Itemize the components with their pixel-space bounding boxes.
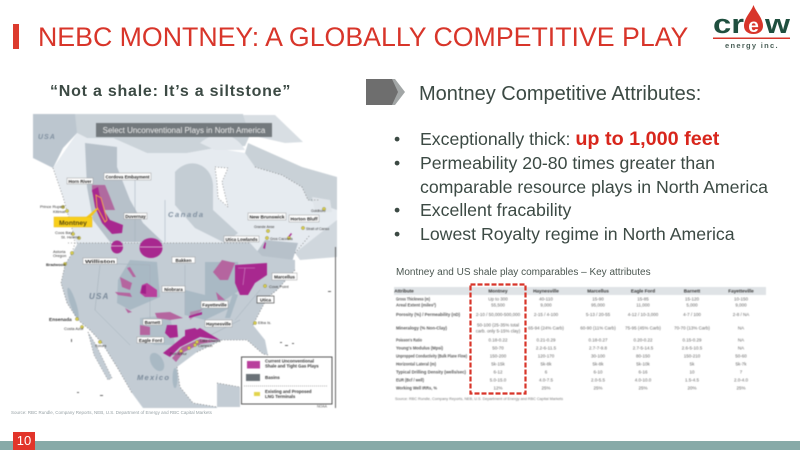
logo wordmark — [713, 9, 791, 39]
table values: 5k-10k — [636, 362, 650, 366]
table values: 40-110 — [539, 296, 553, 302]
attribute bullets: • — [394, 129, 400, 149]
table values: 0.15-0.29 — [682, 338, 702, 342]
Montney callout: Montney — [59, 220, 87, 227]
play name labels: Utica Lowlands — [226, 237, 258, 242]
table header row: Barnett — [684, 288, 701, 294]
country label: USA north: USA — [38, 134, 56, 141]
table values: 15-90 — [592, 296, 604, 302]
table values: NA — [738, 346, 744, 350]
table values: 150-210 — [684, 354, 701, 358]
terminal labels: Lake Charles — [200, 339, 221, 343]
bullet: thick — [394, 128, 720, 150]
state and province borders — [92, 180, 260, 345]
page number — [13, 432, 35, 450]
table values: 25% — [541, 386, 551, 390]
bullet: permeability: • — [394, 153, 400, 173]
table values: 50-100 (25-35% total — [477, 322, 519, 328]
page number: 10 — [17, 433, 31, 448]
table header row: Marcellus — [587, 288, 609, 294]
table values: 2-8 / NA — [733, 312, 749, 317]
attribute bullets: • — [394, 224, 400, 244]
play name labels: Marcellus — [274, 274, 295, 280]
terminal labels: Sonora — [95, 344, 106, 348]
hudson platform basin — [175, 163, 238, 243]
attribute names: Unpropped Conductivity (Bulk Plane Flow) — [396, 354, 467, 358]
attribute bullets: Exceptionally thick: up to 1,000 feet — [420, 128, 719, 150]
table values: 0.20-0.22 — [633, 338, 653, 342]
play name labels: Bakken — [175, 258, 192, 263]
play name labels: Haynesville — [206, 321, 231, 326]
map legend: LNG Terminals — [265, 394, 296, 399]
play name labels: New Brunswick — [250, 214, 285, 219]
terminal labels: Astoria — [53, 249, 66, 254]
map of unconventional plays — [32, 114, 338, 408]
terminal labels: Bradwood — [46, 262, 66, 267]
baja coast speckle — [88, 332, 112, 380]
table header row: Eagle Ford — [631, 288, 655, 294]
map title banner: Select Unconventional Plays in North America — [103, 126, 266, 135]
attribute bullets: • — [394, 200, 400, 220]
scattered caribbean islands — [71, 291, 331, 396]
terminal labels: Strait of Canso — [306, 227, 329, 231]
table values: 2.0-5.5 — [591, 378, 605, 382]
table values: 50-60 — [735, 354, 747, 358]
table values: 6-10 — [593, 370, 603, 374]
logo wordmark: w — [764, 9, 791, 39]
table values: 60-90 (11% Carb) — [580, 326, 616, 330]
table values: 4.0-10.0 — [635, 378, 652, 382]
land: hudson strait band — [245, 143, 337, 210]
table values: 2.6-5-10.5 — [682, 346, 703, 350]
terminal labels: Cove Point — [269, 284, 289, 289]
hudson bay — [215, 167, 228, 207]
attribute names: Porosity (%) / Permeability (nD) — [396, 312, 460, 317]
land: baja — [88, 332, 112, 380]
land: baffin island — [243, 115, 303, 143]
footer band — [0, 441, 800, 450]
land: arctic islands — [75, 114, 250, 153]
Montney callout — [54, 208, 98, 227]
land: usa and mexico — [61, 243, 295, 408]
table values: carb. only 5-15% clay) — [476, 328, 521, 334]
table header row: Fayetteville — [728, 288, 754, 294]
table values: 12% — [493, 386, 503, 390]
table values: 25% — [593, 386, 603, 390]
attribute bullets — [394, 128, 768, 244]
table values: 75-95 (45% Carb) — [625, 326, 661, 330]
table values: 2.2-6-11.5 — [536, 346, 557, 350]
attribute names — [396, 296, 467, 390]
table values: 120-170 — [538, 354, 555, 358]
logo tagline: energy inc. — [725, 41, 779, 50]
attribute names: Mineralogy (% Non-Clay) — [396, 326, 447, 330]
table values: 5k-7k — [735, 362, 747, 366]
attribute names: Horizontal Lateral (m) — [396, 362, 436, 366]
terminal labels: Coos Bay — [55, 230, 72, 235]
attribute names: Young's Modulus (Mpsi) — [396, 346, 443, 350]
table values: 150-200 — [490, 354, 507, 358]
table values: 4-12 / 10-3,000 — [628, 312, 659, 317]
table values: 0.21-0.29 — [536, 338, 556, 342]
right heading: Montney Competitive Attributes: — [419, 83, 701, 105]
table values: 2-15 / 4-100 — [534, 312, 559, 317]
table header row: Attribute — [394, 288, 414, 294]
table values: 0.18-0.22 — [488, 338, 508, 342]
arrow chevron icon — [366, 79, 405, 105]
table values: 5,000 — [686, 302, 698, 308]
table values: 4.0-7.5 — [539, 378, 553, 382]
terminal labels: Goldboro — [311, 209, 325, 213]
terminal labels: St. Helens — [61, 234, 79, 240]
table values: NA — [738, 338, 744, 342]
table values: 70-70 (13% Carb) — [674, 326, 710, 330]
play name labels — [67, 173, 319, 343]
play name labels: Horn River — [68, 179, 92, 184]
play name labels: Duvernay — [125, 214, 146, 219]
table heading: Montney and US shale play comparables – Key attributes — [396, 267, 651, 278]
table values: 20% — [687, 386, 697, 390]
Montney highlight box — [470, 284, 526, 394]
attribute names: EUR (Bcf / well) — [396, 378, 424, 382]
montney and western canada plays — [92, 185, 163, 258]
table values: 95,000 — [591, 302, 605, 308]
eastern plays — [213, 233, 292, 300]
title accent bar — [13, 24, 19, 49]
play name labels: Williston — [85, 259, 115, 264]
source note: Source: RBC Rundle, Company Reports, NEB, U.S. Department of Energy and RBC Capital Markets — [11, 410, 212, 415]
table values: 7 — [740, 370, 743, 374]
map legend: Basins — [265, 375, 280, 380]
play name labels: Fayetteville — [202, 302, 227, 307]
terminal labels: Elba Is. — [258, 320, 271, 325]
logo: crew energy inc. — [713, 5, 791, 50]
table values: 5.0-15.0 — [490, 378, 507, 382]
bullet: permeability: comparable resource plays in North America — [420, 177, 768, 197]
logo rule — [713, 38, 790, 39]
table values: 5k-15k — [491, 362, 505, 366]
table values: 9,000 — [540, 302, 552, 308]
country label: Canada: Canada — [168, 210, 205, 219]
logo drop with e: e — [748, 16, 759, 37]
terminal labels: Gros Cacouna — [270, 237, 293, 241]
table values: 15-85 — [637, 296, 649, 302]
left heading: “Not a shale: It’s a siltstone” — [50, 83, 291, 100]
coast speckle — [53, 167, 320, 407]
map legend — [242, 357, 332, 408]
terminal labels: Port Arthur — [170, 352, 188, 356]
map legend: Shale and Tight Gas Plays — [265, 364, 319, 368]
table values: 4-7 / 100 — [683, 312, 701, 317]
title: NEBC MONTNEY: A GLOBALLY COMPETITIVE PLAY — [38, 22, 688, 52]
table values: 25% — [736, 386, 746, 390]
land: alaska — [33, 114, 87, 168]
table header row — [394, 287, 766, 295]
play name labels: Barnett — [145, 320, 161, 325]
terminal labels: Grande Anse — [254, 225, 274, 229]
map frame right edge — [335, 247, 336, 408]
terminal labels: Kitimat — [53, 209, 66, 214]
western canada basin — [85, 143, 163, 242]
bullet: royalty — [394, 224, 735, 244]
table header row: Montney — [488, 288, 508, 294]
bullet: fracability — [394, 200, 572, 220]
attribute bullets: Lowest Royalty regime in North America — [420, 224, 735, 244]
map legend: Current Unconventional — [265, 358, 314, 364]
table values: 30-100 — [591, 354, 606, 358]
attribute names: Gross Thickness (m) — [396, 296, 430, 302]
table values: 2.7-7-9.8 — [589, 346, 608, 350]
table values: 6-16 — [638, 370, 648, 374]
table values: 5k-8k — [540, 362, 552, 366]
attribute names: Areal Extent (miles²) — [396, 302, 436, 308]
table values: 65-94 (24% Carb) — [528, 326, 564, 330]
table values: 15-120 — [685, 296, 700, 302]
table values: 5k-8k — [592, 362, 604, 366]
table values: 6 — [545, 370, 548, 374]
table values: Up to 300 — [488, 296, 508, 302]
us basins — [65, 260, 240, 388]
table values: 80-150 — [636, 354, 651, 358]
land: yucatan — [217, 383, 240, 407]
table values: 1.5-4.5 — [685, 378, 699, 382]
table values: 2.0-4.0 — [734, 378, 748, 382]
table values: 11,000 — [636, 302, 650, 308]
terminal markers — [61, 205, 326, 353]
terminal labels — [40, 204, 329, 356]
play name labels: Horton Bluff — [290, 216, 318, 221]
play name labels: Cordova Embayment — [106, 174, 150, 179]
terminal labels: Oregon — [53, 253, 66, 258]
table values: 2-10 / 50,000-500,000 — [476, 312, 521, 317]
table values: 9,000 — [735, 302, 747, 308]
terminal labels: Ensenada — [49, 317, 72, 323]
table values: 10-150 — [734, 296, 749, 302]
play name labels: Utica — [260, 298, 271, 302]
table values: 55,500 — [491, 302, 505, 308]
map title banner — [96, 123, 272, 137]
attribute names: Poisson's Ratio — [396, 338, 422, 342]
play name labels: Eagle Ford — [139, 338, 162, 343]
attribute names: Typical Drilling Density (wells/sec) — [396, 370, 466, 374]
table values: NA — [738, 326, 744, 330]
table values: 10 — [689, 370, 695, 374]
labrador light patch — [312, 197, 332, 212]
arctic light channel — [200, 135, 245, 150]
table values — [476, 296, 749, 390]
logo wordmark: cr — [713, 9, 745, 39]
table values: 2.7-5-14.5 — [633, 346, 654, 350]
table values: 25% — [638, 386, 648, 390]
table values: 50-70 — [492, 346, 504, 350]
attribute bullets: Excellent fracability — [420, 200, 571, 220]
terminal labels: Cameron — [198, 344, 212, 348]
appalachian canada basin — [250, 240, 298, 262]
map legend: Existing and Proposed — [265, 389, 312, 394]
table values: 6-12 — [493, 370, 503, 374]
map legend: NOAA — [317, 404, 328, 408]
country label: USA south: USA — [89, 292, 110, 301]
terminal labels: Prince Rupert — [40, 204, 65, 209]
table header row: Haynesville — [533, 288, 559, 294]
terminal labels: Costa Azul — [64, 326, 83, 331]
bullet: permeability: Permeability 20-80 times greater than — [420, 153, 715, 173]
attribute names: Working Well IRRs, % — [396, 386, 437, 390]
table source note: Source: RBC Rundle, Company Reports, NEB, U.S. Department of Energy and RBC Capital Markets — [395, 396, 563, 401]
table values: 0.18-0.27 — [588, 338, 608, 342]
central and southern plays — [115, 267, 220, 362]
comparison table — [394, 283, 766, 402]
land: atlantic provinces — [295, 220, 337, 260]
table values: 5k — [690, 362, 695, 366]
play name labels: Niobrara — [164, 287, 183, 292]
table values: 5-13 / 20-55 — [586, 312, 611, 317]
country label: Mexico: Mexico — [137, 373, 170, 382]
table text and rows — [394, 287, 766, 401]
bullet: permeability — [394, 153, 768, 197]
land: canada — [53, 133, 337, 262]
